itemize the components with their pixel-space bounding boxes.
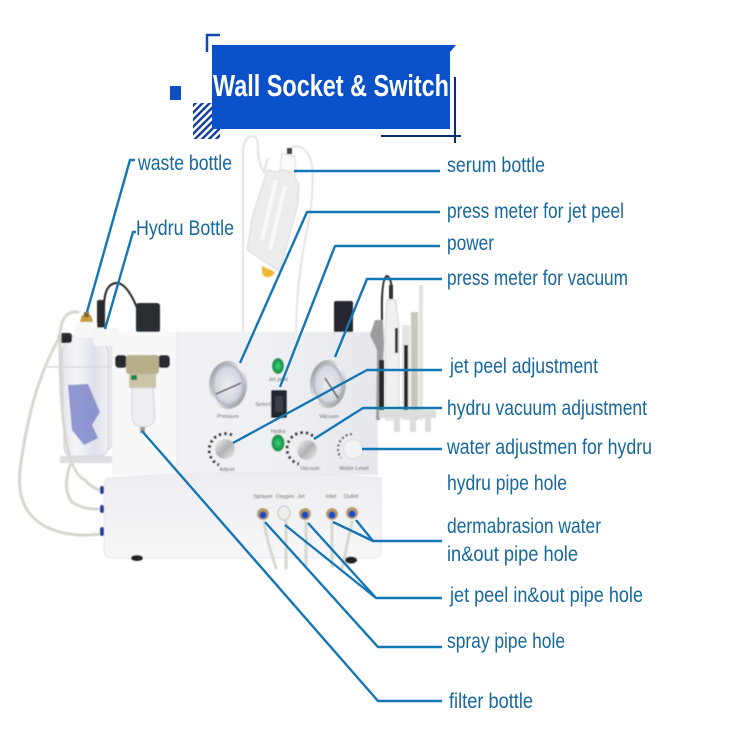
tubes (20, 312, 100, 535)
adjustment knobs (209, 433, 369, 473)
indicator lamps: Jet peel (268, 377, 288, 383)
label: water adjustmen for hydru: water adjustmen for hydru (446, 436, 652, 459)
indicator lamps (255, 358, 288, 452)
title banner: Wall Socket & Switch (213, 68, 449, 103)
label: dermabrasion water in&out pipe hole: dermabrasion water (447, 515, 601, 538)
icon: waste and hydro bottles (46, 312, 119, 463)
label: spray pipe hole: spray pipe hole (447, 630, 565, 653)
leader: hydru vacuum adjustment (314, 408, 442, 439)
label: hydru vacuum adjustment: hydru vacuum adjustment (447, 397, 647, 420)
label: hydru pipe hole: hydru pipe hole (447, 472, 567, 495)
label: jet peel adjustment: jet peel adjustment (449, 355, 598, 378)
leader: waste bottle (87, 160, 135, 312)
connector ports: Oxygen (276, 494, 294, 500)
leader: press meter for jet peel (240, 212, 440, 363)
indicator lamps: Select (255, 402, 271, 408)
label: dermabrasion water in&out pipe hole (447, 515, 601, 566)
icon: serum bottle on hanger (243, 136, 313, 335)
icon: handpiece holder (370, 276, 436, 432)
label: jet peel in&out pipe hole: jet peel in&out pipe hole (449, 584, 643, 607)
leader: serum bottle (294, 170, 440, 172)
leader: spray pipe hole (265, 522, 442, 647)
leader lines (87, 160, 442, 701)
connector ports (100, 486, 359, 568)
leader: water adjustment (362, 448, 442, 450)
leader: filter bottle (142, 431, 442, 701)
pressure gauge: Pressure (217, 414, 239, 420)
machine body (104, 332, 381, 564)
label: press meter for jet peel: press meter for jet peel (447, 200, 624, 223)
adjustment knobs: Vacuum (300, 466, 320, 472)
connector ports: Jet (297, 494, 305, 500)
label: waste bottle: waste bottle (137, 152, 232, 175)
leader: dermabrasion water pipe hole (333, 520, 442, 541)
title banner (170, 35, 461, 143)
icon: black power cable and plug (97, 283, 353, 333)
connector ports: Sprayer (253, 494, 273, 500)
adjustment knobs: Water Level (339, 466, 369, 472)
leader: hydru bottle (105, 232, 136, 329)
leader: jet peel adjustment (233, 370, 442, 443)
label: serum bottle: serum bottle (447, 154, 545, 177)
pressure gauge (209, 361, 247, 420)
machine photo (20, 136, 436, 568)
leader: power (280, 246, 440, 387)
adjustment knobs: Adjust (219, 467, 235, 473)
labels (136, 152, 652, 713)
indicator lamps: Hydra (271, 429, 286, 435)
vacuum gauge: Vacuum (319, 414, 339, 420)
label: power: power (447, 232, 494, 255)
connector ports: Outlet (344, 494, 359, 500)
power switch (271, 390, 287, 418)
connector ports: Inlet (326, 494, 337, 500)
vacuum gauge (310, 360, 346, 420)
icon: filter regulator (115, 355, 170, 433)
leader: jet peel pipe hole (285, 523, 442, 598)
label: filter bottle: filter bottle (449, 690, 533, 713)
label: press meter for vacuum: press meter for vacuum (447, 267, 628, 290)
label: dermabrasion water in&out pipe hole: in&out pipe hole (447, 543, 578, 566)
label: Hydru Bottle: Hydru Bottle (136, 217, 234, 240)
leader: press meter for vacuum (335, 279, 442, 357)
